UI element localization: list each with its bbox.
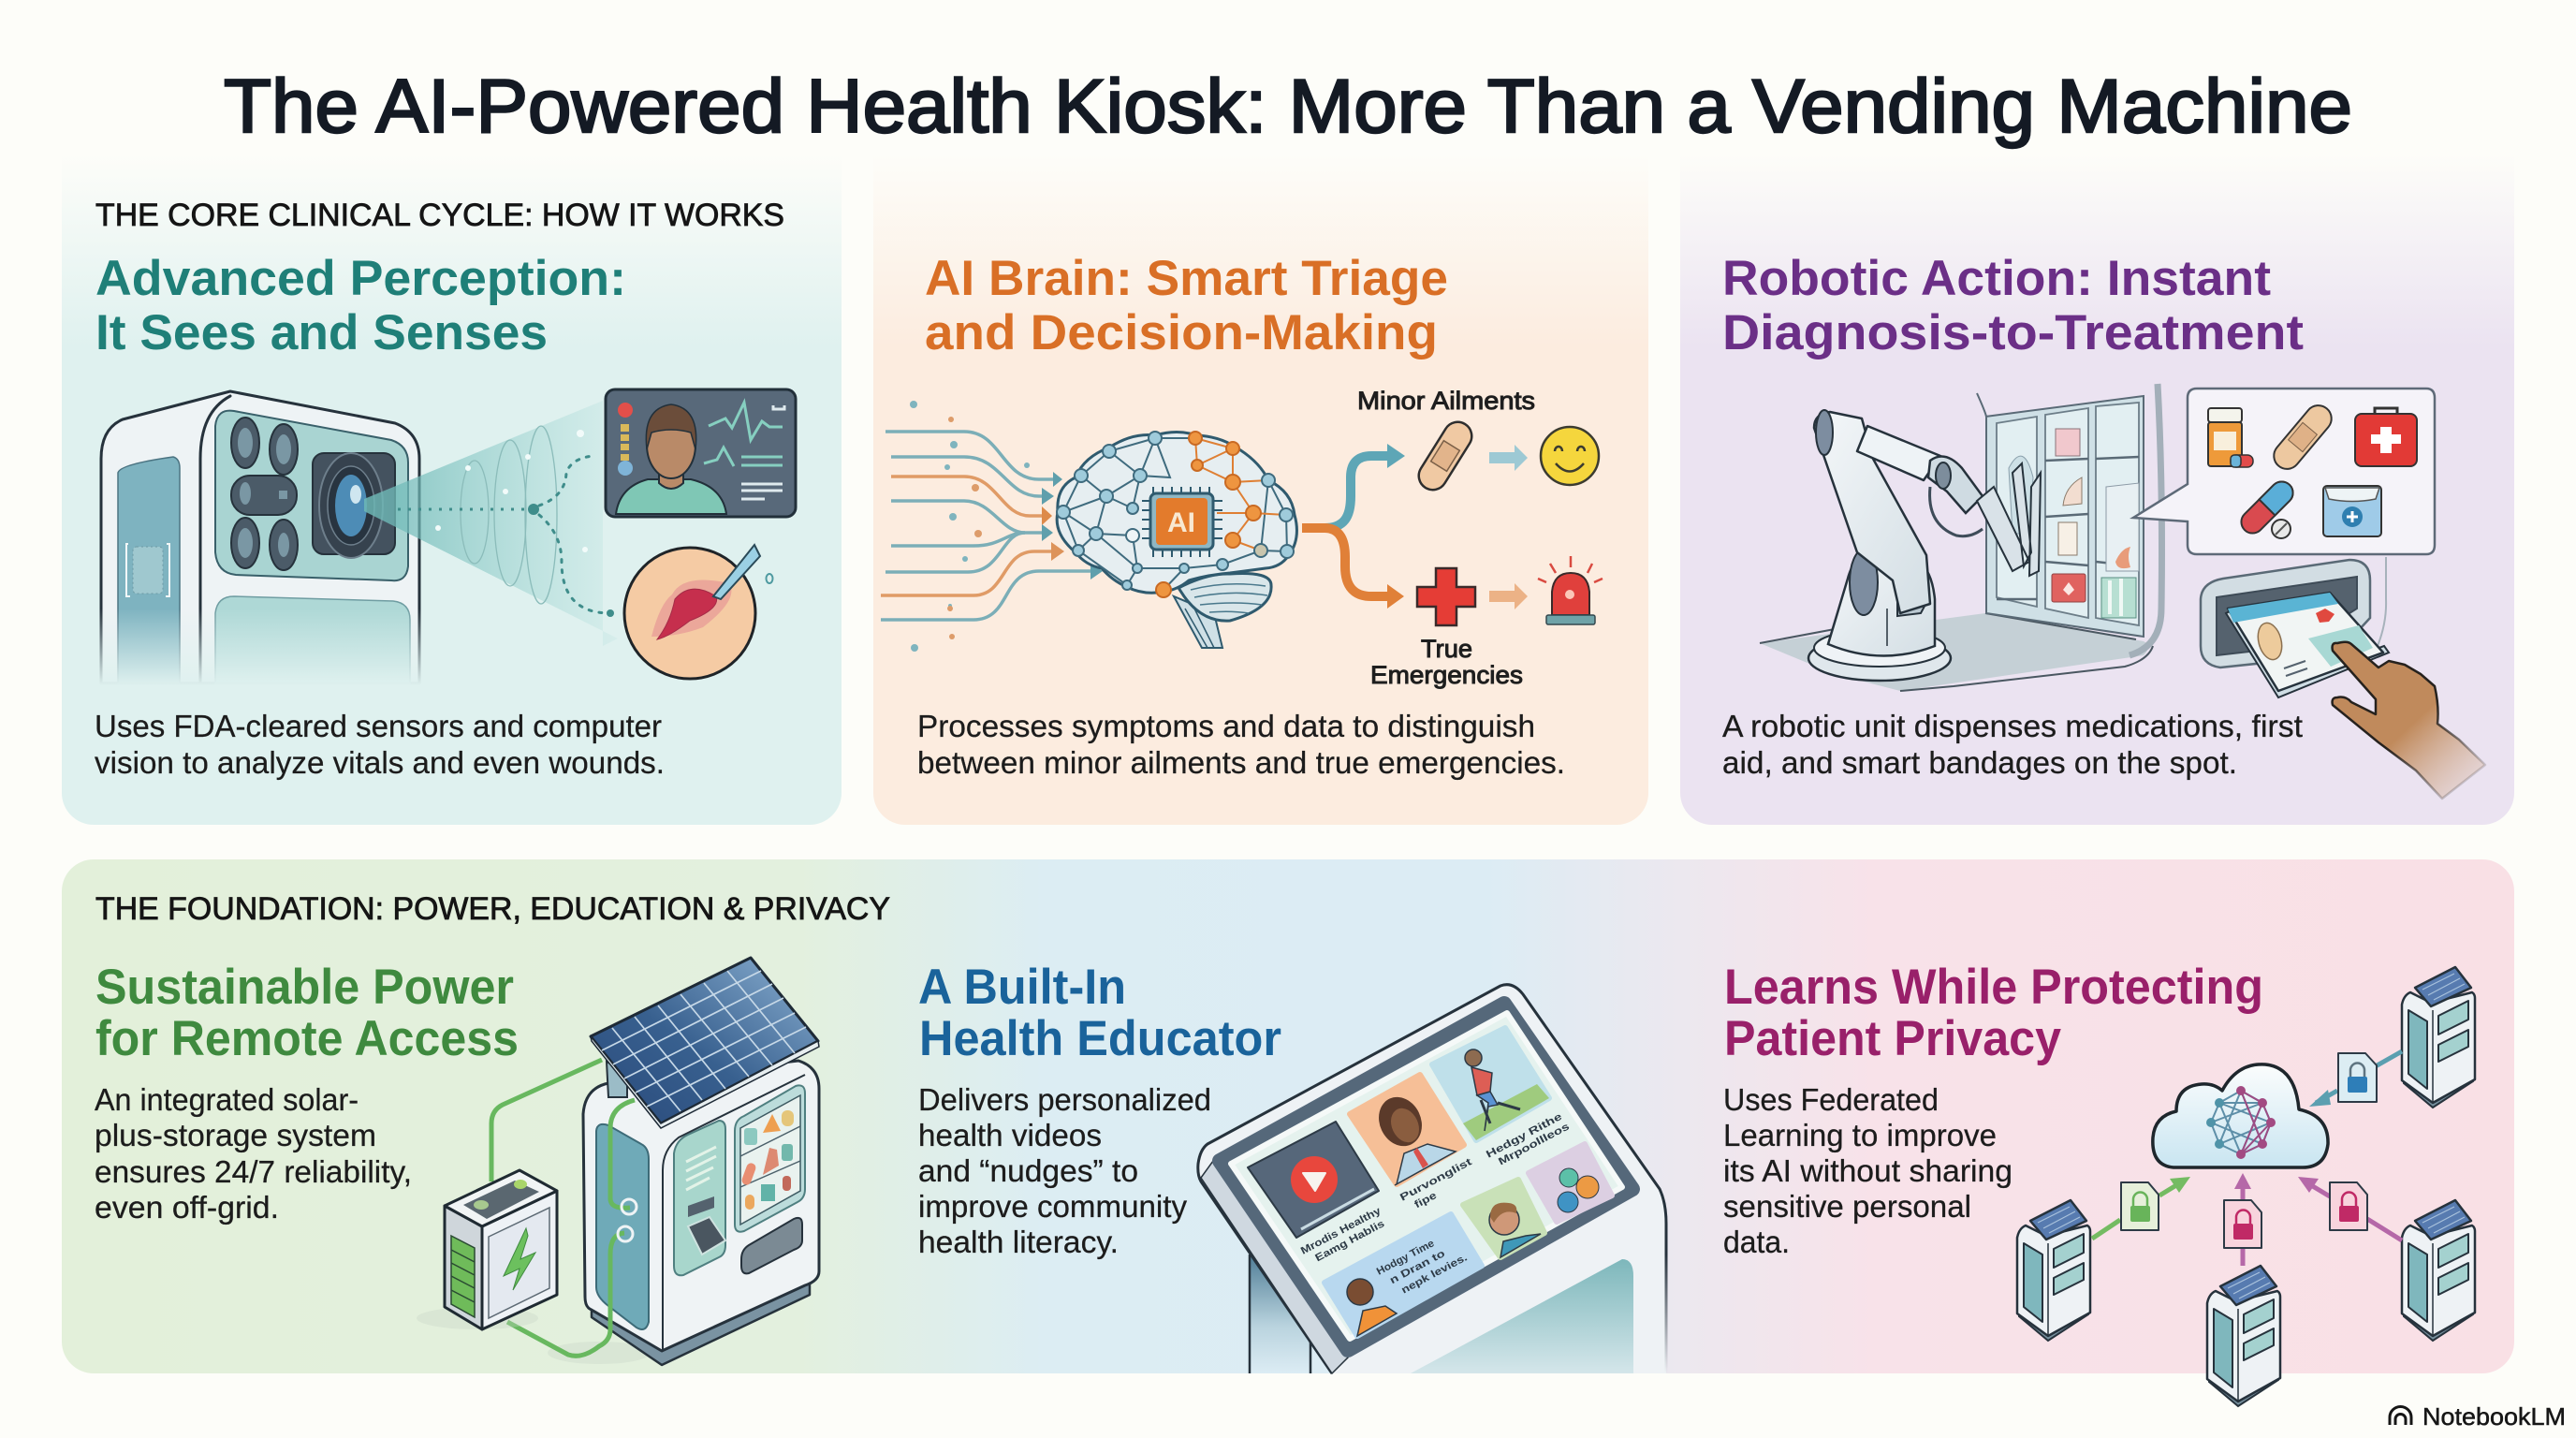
kiosk body (1198, 985, 1666, 1373)
description: Uses Federated (1723, 1082, 1939, 1117)
screen captions: Mrodis Healthy (1299, 1205, 1383, 1257)
heading: robotic action: Robotic Action: Instant (1722, 251, 2271, 306)
description (918, 1082, 1211, 1259)
screen captions: Mrpoollleos (1497, 1121, 1572, 1167)
description (95, 1082, 412, 1225)
description: sensitive personal (1723, 1189, 1971, 1224)
screen captions: Hodgy Time (1375, 1238, 1436, 1278)
heading: sustainable power: Sustainable Power (95, 960, 514, 1015)
flow: center kiosk to cloud (2207, 1173, 2280, 1406)
description: An integrated solar- (95, 1082, 359, 1117)
screen captions: Purvonglist (1398, 1156, 1474, 1204)
panel background orange (873, 140, 1648, 825)
screen (1231, 1013, 1622, 1339)
heading: health educator: Health Educator (919, 1011, 1281, 1066)
label: true emergencies: True (1421, 635, 1472, 663)
icon: AI chip (1142, 487, 1222, 557)
description: and “nudges” to (918, 1153, 1138, 1188)
description: Learning to improve (1723, 1118, 1997, 1152)
screen bezel (1220, 1004, 1632, 1350)
heading: health educator (918, 960, 1281, 1066)
description: Delivers personalized (918, 1082, 1211, 1117)
description: Processes symptoms and data to distinguish (917, 709, 1535, 743)
collection tray (741, 1218, 802, 1273)
title: The AI-Powered Health Kiosk: More Than a Vending Machine (224, 65, 2352, 149)
package (2226, 610, 2389, 697)
description: aid, and smart bandages on the spot. (1722, 745, 2237, 780)
section label: foundation: THE FOUNDATION: POWER, EDUCATION & PRIVACY (95, 891, 890, 927)
input arrowheads (910, 401, 1103, 652)
heading: AI brain (925, 251, 1448, 360)
heading: learns while protecting (1724, 960, 2263, 1066)
screen captions (1299, 1110, 1572, 1302)
arrow: to smile (1489, 445, 1528, 471)
illustration: dispensing slot with package (2201, 557, 2389, 697)
panel: AI brain (873, 140, 1648, 825)
lower panel (1411, 1259, 1633, 1373)
description (1723, 1082, 2012, 1259)
description: even off-grid. (95, 1190, 279, 1225)
pedestal (1250, 1255, 1310, 1373)
illustration: robot arm and medicine cabinet (1760, 384, 2162, 691)
payment screen (674, 1121, 725, 1275)
icon: pill bottle (2208, 408, 2253, 467)
icon: wound scan (624, 545, 773, 679)
screen captions: n Dran to (1388, 1248, 1447, 1286)
panel stand (607, 1062, 627, 1097)
watermark: NotebookLM: NotebookLM (2422, 1402, 2566, 1431)
panel background purple (1680, 140, 2514, 825)
description (1722, 709, 2303, 780)
description: A robotic unit dispenses medications, first (1722, 709, 2303, 743)
robot forearm (1857, 426, 1940, 480)
video tile (1248, 1122, 1379, 1238)
icon: vitals monitor with patient (606, 389, 796, 517)
abstract icon tile (1529, 1144, 1612, 1222)
heading: advanced perception (95, 251, 626, 360)
label: true emergencies: Emergencies (1370, 661, 1523, 689)
screen captions: Hedgy Rithe (1485, 1111, 1564, 1161)
heading: advanced perception: It Sees and Senses (95, 305, 548, 360)
machine base (592, 1264, 810, 1365)
block: privacy (1723, 960, 2475, 1406)
flow: left kiosk to cloud (2017, 1177, 2190, 1341)
description: data. (1723, 1225, 1790, 1259)
camera lens (313, 453, 395, 554)
output split arrows (1302, 444, 1405, 609)
machine body (583, 1061, 819, 1351)
icon: first aid kit (2355, 408, 2417, 466)
heading: AI brain: and Decision-Making (925, 305, 1438, 360)
heading: AI brain: AI Brain: Smart Triage (925, 251, 1448, 306)
label: true emergencies (1370, 635, 1523, 689)
icon: red cross (1417, 568, 1475, 625)
heading: learns while protecting: Learns While Protecting (1724, 960, 2263, 1015)
nudge tile (1325, 1214, 1482, 1336)
heading: learns while protecting: Patient Privacy (1724, 1011, 2061, 1066)
heading: robotic action (1722, 251, 2304, 360)
heading: sustainable power: for Remote Access (95, 1011, 519, 1066)
icon: hand pointing (2333, 642, 2485, 799)
callout: dispensed items (2133, 389, 2435, 554)
description: health literacy. (918, 1225, 1119, 1259)
illustration: touchscreen kiosk (1198, 985, 1666, 1373)
solar panel (591, 958, 818, 1123)
heading: robotic action: Diagnosis-to-Treatment (1722, 305, 2304, 360)
screen captions: nepk levies. (1399, 1252, 1470, 1297)
illustration: kiosk with camera (94, 391, 618, 687)
description: health videos (918, 1118, 1102, 1152)
runner tile (1432, 1028, 1549, 1140)
icon: alarm light (1538, 556, 1603, 624)
description: improve community (918, 1189, 1187, 1224)
block: health educator (918, 960, 1666, 1373)
icon: bandage (2269, 400, 2336, 475)
description: between minor ailments and true emergencies. (917, 745, 1565, 780)
icon: smiley (1541, 427, 1599, 485)
icon: cloud with neural network (2153, 1064, 2328, 1167)
panel background teal (62, 140, 842, 825)
description: Uses FDA-cleared sensors and computer (95, 709, 662, 743)
section label: core clinical cycle: THE CORE CLINICAL CYCLE: HOW IT WORKS (95, 198, 784, 233)
description: its AI without sharing (1723, 1153, 2012, 1188)
product window (735, 1085, 805, 1232)
panel: foundation (62, 859, 2514, 1406)
icon: AI chip: AI (1167, 507, 1195, 538)
panel: robotic action (1680, 140, 2514, 825)
icon: battery (417, 1170, 557, 1329)
description (917, 709, 1565, 780)
screen captions: fipe (1412, 1190, 1439, 1211)
flow: top right kiosk to cloud (2309, 967, 2475, 1108)
person tile (1463, 1180, 1544, 1257)
screen captions: Eamg Hablis (1313, 1218, 1386, 1264)
scan beam (364, 401, 618, 646)
flow: right kiosk to cloud (2298, 1177, 2475, 1341)
illustration: solar kiosk (417, 958, 819, 1365)
heading: health educator: A Built-In (918, 960, 1126, 1015)
doctor tile (1350, 1075, 1464, 1185)
robot base (1808, 550, 1951, 681)
icon: bandage (1413, 417, 1477, 495)
panel: advanced perception (62, 140, 842, 825)
icon: capsule and tablet (2236, 477, 2298, 538)
power cables (491, 1060, 635, 1356)
label: minor ailments: Minor Ailments (1357, 387, 1535, 415)
description (95, 709, 665, 780)
heading: advanced perception: Advanced Perception: (95, 251, 626, 306)
robot gripper (1977, 463, 2041, 576)
icon: smart bandage pouch (2323, 486, 2381, 536)
description: vision to analyze vitals and even wounds. (95, 745, 665, 780)
arrow: to alarm (1489, 583, 1528, 609)
robot upper arm (1814, 412, 1930, 613)
heading: sustainable power (95, 960, 519, 1066)
icon: brain with AI chip (1057, 432, 1296, 648)
input data streams (881, 432, 1099, 620)
panel background gradient (62, 859, 2514, 1373)
description: ensures 24/7 reliability, (95, 1154, 412, 1189)
sensors (231, 418, 298, 570)
block: sustainable power (95, 958, 819, 1365)
description: plus-storage system (95, 1118, 376, 1152)
